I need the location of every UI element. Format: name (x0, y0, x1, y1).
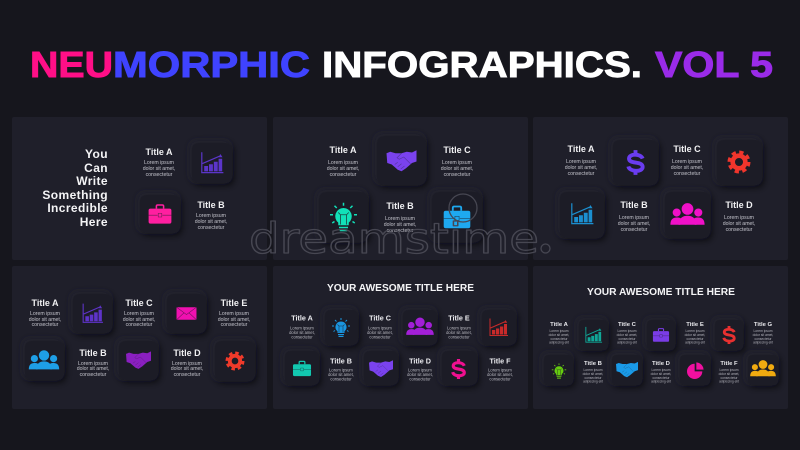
text block: Title B: consectetur (80, 372, 107, 378)
icon: people tile (25, 341, 64, 380)
text block: Title E: dolor sit amet, (685, 333, 705, 337)
text block: Title F: Lorem ipsum (488, 368, 512, 372)
text block: Title B: Title B (79, 348, 107, 358)
text block: Title C: Lorem ipsum (442, 160, 472, 166)
text block: Title A: dolor sit amet, (565, 165, 597, 171)
text block: Title A (143, 147, 175, 178)
text block: Title B: Lorem ipsum (385, 216, 415, 222)
text block: Title A: dolor sit amet, (289, 330, 315, 335)
text block: Title F: dolor sit amet, (487, 372, 513, 377)
text block: tagline: Can (84, 161, 108, 175)
text block: Title B: consectetur (198, 225, 225, 231)
text block: Title E: Title E (686, 322, 704, 328)
text block: Title D: dolor sit amet, (651, 372, 671, 376)
text block: Title C: consectetur (126, 322, 153, 328)
icon: handshake tile (364, 351, 398, 385)
text block: Title E: Lorem ipsum (685, 329, 705, 333)
text block: tagline: Write (76, 174, 108, 188)
text block: Title A (327, 145, 359, 178)
text block: Title B: Lorem ipsum (329, 368, 353, 372)
text block: Title E: Title E (221, 298, 247, 308)
icon: dollar tile (613, 140, 658, 185)
text block: Title A (289, 314, 315, 340)
text block: Title D: consectetur (652, 376, 670, 380)
text block: Title B: dolor sit amet, (328, 372, 354, 377)
text block: Title B: Title B (620, 200, 648, 210)
icon: people tile (403, 310, 437, 345)
text block: Title F: Lorem ipsum (719, 368, 739, 372)
title: MORPHIC (113, 44, 310, 85)
text block: Title B: consectetur (387, 228, 414, 234)
text block: Title E: Title E (448, 314, 470, 322)
text block: Title B: Lorem ipsum (78, 361, 108, 367)
text block: Title A: Lorem ipsum (290, 326, 314, 330)
panel: seven items (533, 266, 788, 409)
icon: gear tile (215, 341, 255, 381)
text block: Title C: adipiscing elit (617, 340, 637, 344)
panel: three items (273, 117, 528, 260)
text block: Title D: dolor sit amet, (171, 366, 203, 372)
text block: Title A: consectetur (330, 172, 357, 178)
panel: six items (273, 266, 528, 409)
title: VOL 5 (655, 44, 773, 85)
text block: Title G: adipiscing elit (753, 340, 773, 344)
text block: Title A: Title A (291, 314, 313, 322)
title (30, 44, 773, 85)
text block: Title A: Lorem ipsum (30, 311, 60, 317)
text block: Title D: Lorem ipsum (724, 215, 754, 221)
text block: Title D: dolor sit amet, (407, 372, 433, 377)
text block: Title D: adipiscing elit (651, 380, 671, 384)
text block: Title F: adipiscing elit (719, 380, 739, 384)
text block: Title A: Lorem ipsum (549, 329, 569, 333)
text block: Title B (384, 201, 416, 234)
text block: Title G: consectetur (754, 337, 772, 341)
text block: Title C: Title C (125, 298, 153, 308)
text block: Title G: dolor sit amet, (753, 333, 773, 337)
text block: Title C: Lorem ipsum (124, 311, 154, 317)
text block: Title D: Title D (725, 200, 753, 210)
text block: Title B: Title B (584, 361, 602, 367)
text block: Title D: Lorem ipsum (172, 361, 202, 367)
icon: handshake tile (119, 341, 158, 380)
text block: Title C: consectetur (444, 172, 471, 178)
text block: Title D: Title D (409, 356, 431, 366)
icon: briefcase tile (140, 195, 180, 233)
text block: Title E: consectetur (448, 334, 470, 340)
icon: handshake tile (612, 355, 642, 385)
text block: Title G: Lorem ipsum (753, 329, 773, 333)
watermark (249, 194, 550, 263)
text block: Title G: Title G (754, 322, 773, 328)
text block: Title G (753, 322, 773, 344)
panel: five items (12, 266, 267, 409)
text block: Title C: Title C (618, 322, 637, 328)
watermark: dreamstime (249, 214, 539, 263)
text block: Title C: Lorem ipsum (672, 159, 702, 165)
text block: Title A (549, 322, 569, 344)
text block: Title B: dolor sit amet, (195, 219, 227, 225)
text block: Title D: dolor sit amet, (723, 221, 755, 227)
text block: Title B: dolor sit amet, (77, 366, 109, 372)
text block: Title F: Title F (720, 361, 738, 367)
text block: tagline: Something (42, 188, 108, 202)
text block: Title B (195, 200, 227, 231)
text block: tagline: Here (80, 215, 108, 229)
text block: Title C: dolor sit amet, (123, 317, 155, 323)
text block: Title E: Lorem ipsum (447, 326, 471, 330)
text block: Title B: Lorem ipsum (583, 368, 603, 372)
text block: Title B: Lorem ipsum (619, 215, 649, 221)
title: NEU (30, 44, 113, 85)
icon: dollar tile (442, 351, 477, 385)
icon: dollar tile (715, 320, 743, 350)
text block: Title C: dolor sit amet, (671, 165, 703, 171)
text block: Title A: dolor sit amet, (29, 317, 61, 323)
text block: Title B (328, 356, 354, 382)
panel: four items (533, 117, 788, 260)
text block: Title B: dolor sit amet, (618, 221, 650, 227)
text block: Title A: consectetur (291, 334, 313, 340)
text block: Title A: Title A (31, 298, 59, 308)
text block: Title D: Lorem ipsum (408, 368, 432, 372)
text block: Title F: Title F (489, 356, 511, 366)
text block: Title B: consectetur (584, 376, 602, 380)
panel: two items (12, 117, 267, 260)
icon: people tile (748, 355, 778, 385)
text block: Title D: Title D (173, 348, 201, 358)
text block: Title E: consectetur (221, 322, 248, 328)
text block: Title B (583, 361, 603, 384)
text block: Title C (441, 145, 473, 178)
text block: Title B: consectetur (621, 227, 648, 233)
text block: tagline: Incredible (47, 201, 108, 215)
text block: Title E: dolor sit amet, (446, 330, 472, 335)
text block: Title C: dolor sit amet, (617, 333, 637, 337)
icon: light bulb tile (544, 355, 573, 385)
text block: Title A (29, 298, 61, 328)
text block: Title C (367, 314, 393, 340)
text block: Title A: Title A (550, 322, 569, 328)
text block: Title D: consectetur (174, 372, 201, 378)
icon: mail tile (167, 294, 206, 333)
text block: Title A: consectetur (550, 337, 568, 341)
text block: Title B: consectetur (330, 376, 352, 382)
text block: Title A: dolor sit amet, (143, 166, 175, 172)
text block: Title B (77, 348, 109, 378)
text block: Title F (487, 356, 513, 382)
icon: light bulb tile (325, 310, 358, 345)
text block: Title E: consectetur (686, 337, 704, 341)
text block: Title A: Title A (567, 144, 595, 154)
text block: Title E (685, 322, 705, 344)
text block: Title C: Lorem ipsum (617, 329, 637, 333)
text block: Title D (407, 356, 433, 382)
text block: Title C: dolor sit amet, (441, 166, 473, 172)
text block: Title A: Title A (329, 145, 357, 155)
icon: briefcase tile (647, 320, 675, 350)
text block: Title C (123, 298, 155, 328)
text block: Title A: consectetur (568, 171, 595, 177)
text block: Title D: consectetur (726, 227, 753, 233)
text block: Title A (565, 144, 597, 177)
text block: Title D (171, 348, 203, 378)
text block: Title A: dolor sit amet, (549, 333, 569, 337)
icon: light bulb tile (319, 192, 368, 242)
icon: pie chart tile (680, 355, 710, 385)
text block: Title B: Title B (330, 356, 352, 366)
text block: tagline: You (85, 147, 108, 161)
title: INFOGRAPHICS. (322, 44, 642, 85)
text block: Title D: Title D (652, 361, 670, 367)
text block: Title A: Lorem ipsum (328, 160, 358, 166)
icon: briefcase tile (285, 351, 319, 385)
icon: bar chart tile (73, 294, 112, 333)
text block: tagline (42, 147, 108, 229)
text block: Title C: dolor sit amet, (367, 330, 393, 335)
text block: Title A: Lorem ipsum (566, 159, 596, 165)
text block: Title A: consectetur (146, 172, 173, 178)
text block: Title A: consectetur (32, 322, 59, 328)
text block: Title F: dolor sit amet, (719, 372, 739, 376)
icon: bar chart tile (560, 192, 604, 238)
text block: Title F: consectetur (489, 376, 511, 382)
text block: Title F: consectetur (720, 376, 738, 380)
text block: Title E (218, 298, 250, 328)
text block: Title B: dolor sit amet, (384, 222, 416, 228)
text block: Title E: adipiscing elit (685, 340, 705, 344)
text block: Title A: adipiscing elit (549, 340, 569, 344)
text block: Title D (723, 200, 755, 233)
icon: people tile (665, 192, 710, 238)
text block: Title C: Lorem ipsum (368, 326, 392, 330)
text block: Title B: Lorem ipsum (196, 213, 226, 219)
text block: Title E (446, 314, 472, 340)
icon: bar chart tile (192, 143, 232, 183)
text block: Title B: Title B (197, 200, 225, 210)
text block: Title C (617, 322, 637, 344)
text block: Title A: Title A (145, 147, 173, 157)
text block: Title C: consectetur (674, 171, 701, 177)
text block: Title B (618, 200, 650, 233)
text block: Title F (719, 361, 739, 384)
text block: Title B: Title B (386, 201, 414, 211)
text block: Title C: Title C (443, 145, 471, 155)
icon: briefcase tile (432, 192, 482, 242)
heading: YOUR AWESOME TITLE HERE (587, 286, 735, 298)
text block: Title C: Title C (673, 144, 701, 154)
text block: Title C (671, 144, 703, 177)
text block: Title B: adipiscing elit (583, 380, 603, 384)
text block: Title B: dolor sit amet, (583, 372, 603, 376)
text block: Title A: dolor sit amet, (327, 166, 359, 172)
icon: gear tile (717, 140, 762, 185)
text block: Title D: Lorem ipsum (651, 368, 671, 372)
text block: Title C: consectetur (618, 337, 636, 341)
text block: Title E: dolor sit amet, (218, 317, 250, 323)
text block: Title E: Lorem ipsum (219, 311, 249, 317)
text block: Title D (651, 361, 671, 384)
heading: YOUR AWESOME TITLE HERE (327, 282, 474, 294)
text block: Title C: Title C (369, 314, 391, 322)
text block: Title D: consectetur (409, 376, 431, 382)
text block: Title A: Lorem ipsum (144, 160, 174, 166)
icon: bar chart tile (579, 320, 608, 350)
text block: Title C: consectetur (369, 334, 391, 340)
icon: bar chart tile (482, 310, 516, 345)
icon: handshake tile (377, 136, 426, 185)
